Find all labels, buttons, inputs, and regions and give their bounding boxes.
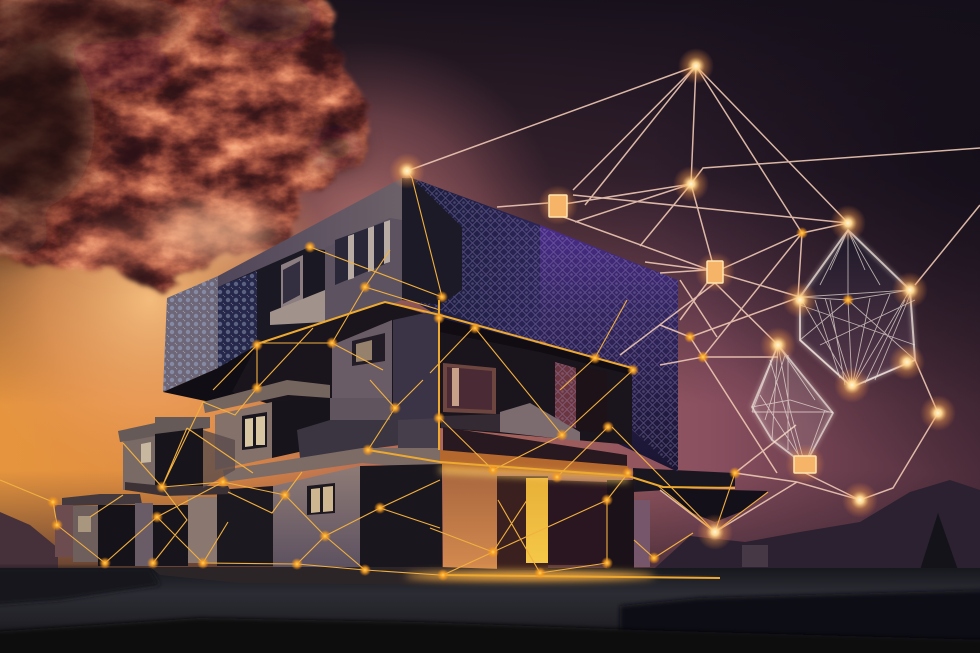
left wing wall xyxy=(123,436,155,490)
left wing slab xyxy=(125,482,232,496)
far wing far wall xyxy=(55,505,73,557)
tree xyxy=(920,513,958,570)
far wing light xyxy=(135,503,153,566)
far wing dark right xyxy=(153,505,188,566)
ground window xyxy=(307,483,335,515)
walkway xyxy=(150,567,720,585)
cylinder xyxy=(330,398,390,420)
lit line under overhang xyxy=(440,470,628,479)
dark right wall xyxy=(576,366,607,433)
far wing window xyxy=(78,516,91,532)
left distant hill xyxy=(0,512,58,570)
slab under window xyxy=(441,414,500,432)
left wing dark xyxy=(155,428,203,488)
upper block: pattern facade right xyxy=(412,178,678,472)
grass right side xyxy=(620,590,980,653)
balcony white block xyxy=(500,403,580,441)
balcony glass xyxy=(203,430,235,488)
wall block xyxy=(398,418,440,462)
grass left xyxy=(0,568,160,605)
long slab xyxy=(223,448,440,482)
door frame xyxy=(497,476,548,569)
glowing nodes xyxy=(389,48,956,550)
polyhedron: large xyxy=(800,230,915,387)
second floor wall xyxy=(332,320,392,422)
dark mid wall xyxy=(217,486,273,566)
distant small buildings xyxy=(742,545,768,567)
gold network over building xyxy=(0,171,768,575)
dark right ground wall xyxy=(548,480,607,565)
ground dark wall xyxy=(360,464,442,574)
balcony wall left xyxy=(215,402,272,470)
left wing window xyxy=(141,442,151,463)
second floor dark body xyxy=(232,302,632,445)
patterned panel left xyxy=(163,276,218,392)
canopy right xyxy=(633,468,768,567)
building xyxy=(55,178,768,574)
soffit under upper block xyxy=(163,345,262,402)
door glow xyxy=(526,478,548,563)
left wing roof xyxy=(118,417,210,442)
dark band xyxy=(443,427,627,466)
grass foreground xyxy=(0,618,980,653)
distant mountains xyxy=(655,480,980,575)
square glowing nodes xyxy=(538,185,825,484)
upper block: grey wall xyxy=(218,178,402,345)
upper recess xyxy=(218,248,325,372)
balcony window xyxy=(242,412,267,450)
patterned panel blue xyxy=(218,271,257,372)
light panel xyxy=(188,497,217,563)
upper windows right xyxy=(335,220,390,285)
clouds top-left xyxy=(0,0,372,290)
curved wall xyxy=(325,218,402,330)
thick gold lines xyxy=(257,300,735,578)
upper window left xyxy=(281,255,303,312)
pale network lines xyxy=(407,66,980,532)
small gold nodes xyxy=(47,227,854,581)
ground xyxy=(0,568,980,653)
red pattern strip xyxy=(555,362,576,428)
dark corner face xyxy=(402,178,462,305)
far wing dark xyxy=(98,505,135,566)
walkway glow xyxy=(405,571,655,581)
orange wall xyxy=(443,470,497,574)
corner ground wall xyxy=(607,480,634,568)
second floor right wall xyxy=(393,310,438,420)
dark slab xyxy=(440,318,632,375)
far wing wall xyxy=(73,506,98,562)
far wing roof xyxy=(62,494,142,506)
lit overhang xyxy=(440,450,628,478)
balcony dark xyxy=(272,398,330,458)
light balcony xyxy=(270,288,335,325)
ground floor walls xyxy=(273,466,360,570)
wide window xyxy=(443,363,496,414)
polyhedron: small xyxy=(752,345,833,465)
balcony furniture xyxy=(297,410,400,458)
second floor window xyxy=(352,333,385,366)
slab band upper left xyxy=(203,380,330,413)
